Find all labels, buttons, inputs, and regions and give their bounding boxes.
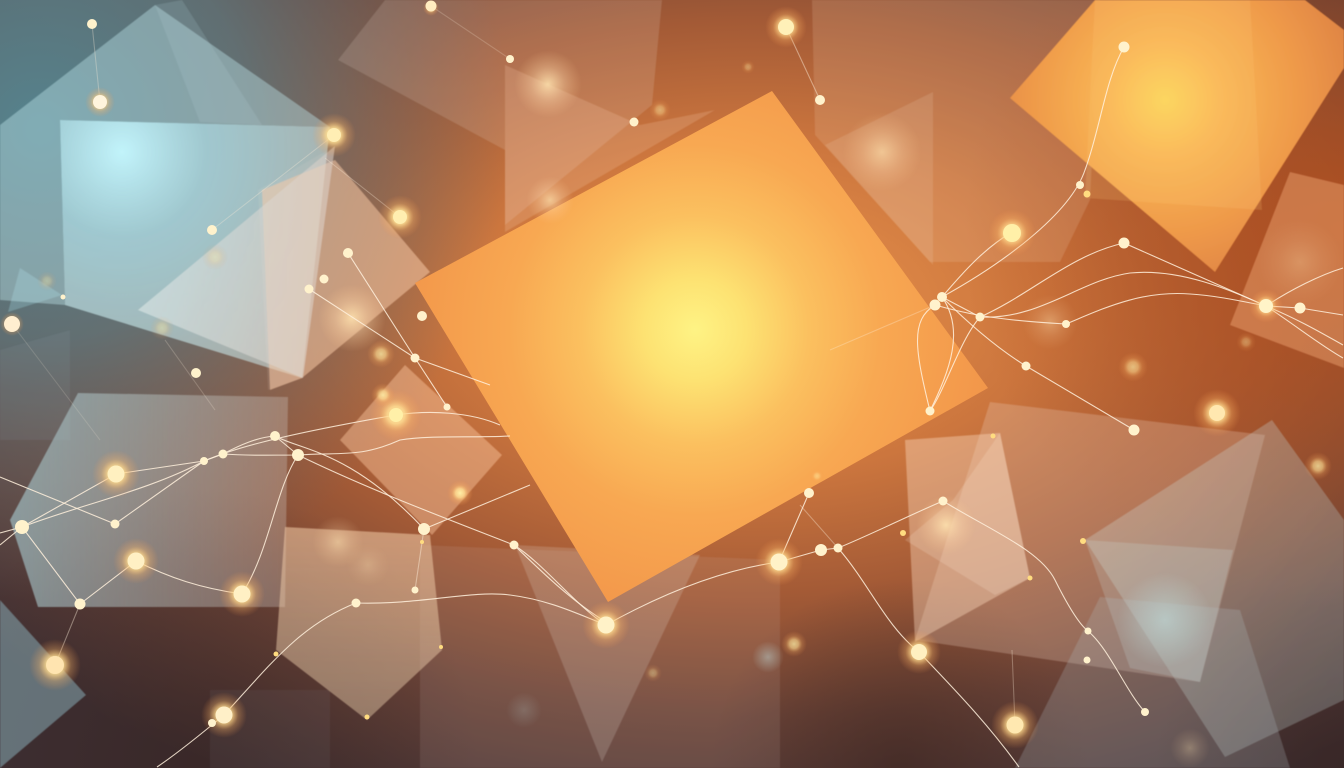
panel: tall sliver — [258, 146, 335, 390]
panel: top-right inner rectangle — [1085, 0, 1262, 210]
corner sparks — [274, 190, 1090, 720]
panel: peach card — [905, 433, 1030, 642]
panel: blue glowing square — [60, 120, 330, 378]
panel: lower left dim — [210, 690, 330, 768]
panel: left square — [10, 393, 288, 607]
panel: bottom triangle — [515, 545, 700, 762]
panel: top-left blue shape — [0, 5, 330, 305]
panel: right quad — [1230, 172, 1344, 368]
panel: small teal triangle — [8, 268, 62, 312]
panel: right large shape — [1085, 420, 1344, 757]
panel: bottom-right shape — [1015, 597, 1290, 768]
panel: right lower rectangle — [1085, 540, 1233, 682]
panel: right grey-peach quad — [915, 402, 1265, 682]
network lines: right cluster — [830, 47, 1343, 430]
network lines: left cluster — [0, 6, 820, 767]
panel: peach quad — [262, 160, 430, 390]
panel: top-left sliver — [155, 0, 262, 125]
panel: left dim — [0, 330, 70, 440]
panel: tan pentagon — [276, 527, 442, 720]
panel: top centre quad — [338, 0, 662, 225]
glow halos — [312, 50, 1344, 768]
right panels — [905, 0, 1344, 768]
network lines: bottom cluster — [606, 493, 1145, 767]
panel: small diamond — [340, 365, 502, 535]
panel: top-right orange diamond — [1010, 0, 1344, 272]
panel: top centre triangle — [505, 65, 715, 232]
panel: top right translucent — [812, 0, 1100, 262]
panel: small triangle — [825, 92, 933, 265]
panel: inner triangle — [905, 433, 1030, 595]
panel: pale quad — [138, 146, 335, 378]
panel: lower centre — [420, 545, 780, 768]
panel: main orange square — [415, 91, 988, 602]
panel: bottom-left shape — [0, 600, 86, 768]
faint bokeh lights — [37, 60, 1332, 682]
